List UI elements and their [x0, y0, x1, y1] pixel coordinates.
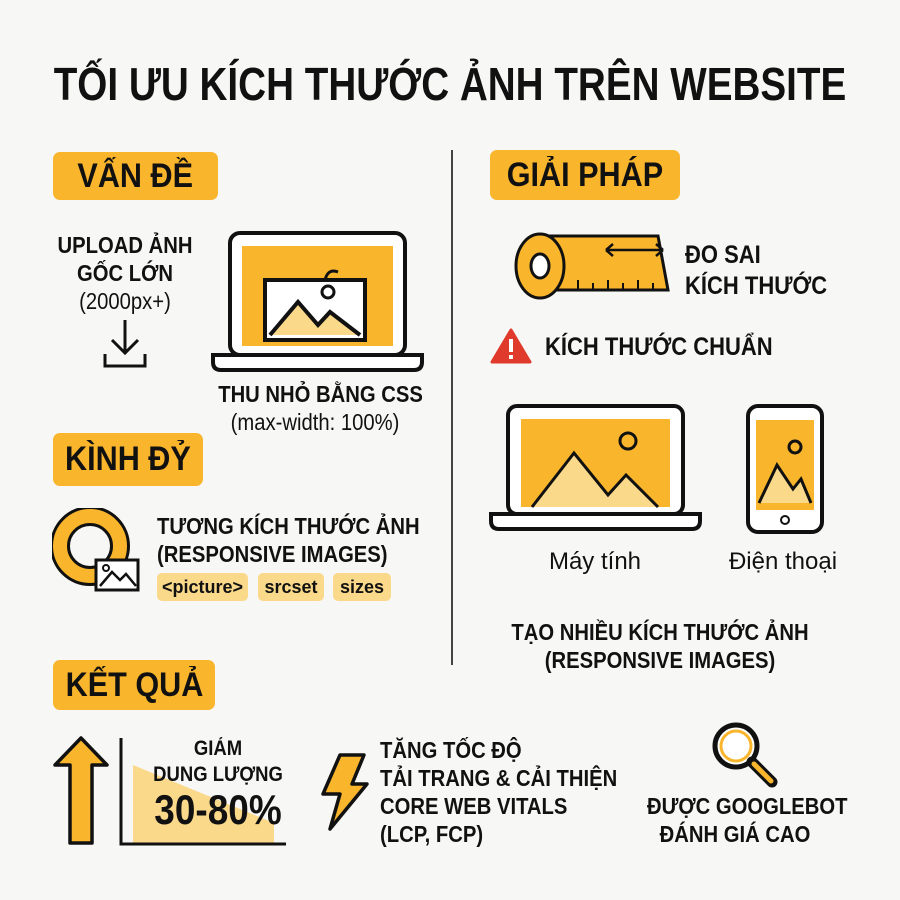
badge: kình đỷ: KÌNH ĐỶ	[65, 440, 191, 478]
chart: reduction	[120, 737, 286, 846]
icon: tape measure	[514, 232, 670, 300]
text: tạo nhiều: TẠO NHIỀU KÍCH THƯỚC ẢNH	[511, 619, 809, 645]
label: máy tính: Máy tính	[549, 548, 641, 575]
text: responsive: (RESPONSIVE IMAGES)	[157, 541, 388, 567]
badge: kết quả: KẾT QUẢ	[65, 666, 203, 704]
text: tăng tốc: CORE WEB VITALS	[380, 793, 567, 819]
badge: giải pháp	[490, 150, 680, 200]
icon: download	[104, 320, 146, 368]
text: upload: GỐC LỚN	[77, 260, 173, 286]
text: tăng tốc: (LCP, FCP)	[380, 821, 483, 847]
icon: laptop 1	[211, 231, 424, 372]
text: googlebot	[647, 793, 848, 847]
text: tạo nhiều	[511, 619, 809, 673]
icon: magnifier	[712, 722, 778, 788]
chart: reduction: DUNG LƯỢNG	[153, 763, 283, 786]
icon: warning	[490, 328, 532, 364]
label: điện thoại: Điện thoại	[729, 548, 837, 575]
text: googlebot: ĐÁNH GIÁ CAO	[660, 821, 810, 847]
text: tăng tốc	[380, 737, 617, 847]
text: responsive: TƯƠNG KÍCH THƯỚC ẢNH	[157, 513, 420, 539]
badge: kết quả	[53, 660, 215, 710]
text: tăng tốc: TĂNG TỐC ĐỘ	[380, 737, 522, 763]
text: upload: (2000px+)	[79, 288, 171, 314]
text: đo sai: KÍCH THƯỚC	[685, 272, 827, 300]
text: thu nhỏ	[218, 381, 423, 435]
icon: donut image	[52, 508, 140, 592]
text: thu nhỏ: (max-width: 100%)	[231, 409, 399, 435]
text: googlebot: ĐƯỢC GOOGLEBOT	[647, 793, 847, 819]
icon: up arrow	[53, 736, 109, 845]
chips	[157, 573, 391, 601]
text: upload	[58, 232, 192, 314]
text: upload: UPLOAD ẢNH	[58, 232, 192, 258]
badge: vấn đề	[53, 152, 218, 200]
divider	[451, 150, 453, 665]
chips: srcset	[264, 576, 318, 596]
text: kích thước chuẩn: KÍCH THƯỚC CHUẨN	[545, 333, 773, 361]
text: tạo nhiều: (RESPONSIVE IMAGES)	[545, 647, 775, 673]
text: đo sai: ĐO SAI	[685, 241, 761, 269]
text: responsive	[157, 513, 420, 567]
icon: lightning	[321, 753, 369, 831]
text: đo sai	[685, 241, 827, 300]
badge: kình đỷ	[53, 433, 203, 486]
title: TỐI ƯU KÍCH THƯỚC ẢNH TRÊN WEBSITE	[54, 58, 846, 110]
chips: <picture>	[162, 576, 243, 596]
icon: laptop 2	[489, 404, 702, 531]
chart: reduction: GIẢM	[194, 737, 242, 760]
chart: reduction: 30-80%	[154, 786, 282, 833]
badge: vấn đề: VẤN ĐỀ	[78, 156, 193, 194]
text: tăng tốc: TẢI TRANG & CẢI THIỆN	[380, 765, 617, 791]
text: thu nhỏ: THU NHỎ BẰNG CSS	[218, 381, 423, 407]
badge: giải pháp: GIẢI PHÁP	[507, 156, 663, 194]
icon: phone	[746, 404, 824, 534]
chips: sizes	[340, 576, 384, 596]
